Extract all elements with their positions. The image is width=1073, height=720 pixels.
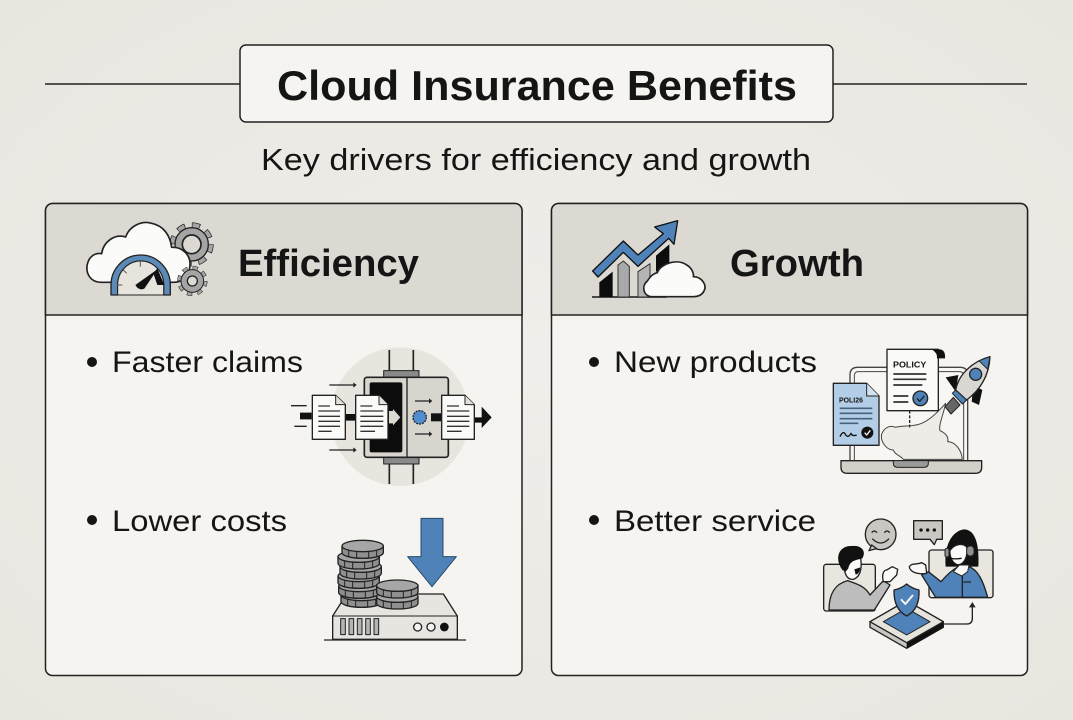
panel header: efficiency [46, 204, 522, 315]
subtitle: Key drivers for efficiency and growth [261, 142, 811, 177]
icon: coins, server and down arrow [324, 518, 466, 640]
icon: customer and agent with shield [824, 519, 993, 648]
title: Cloud Insurance Benefits [277, 62, 797, 109]
icon: cloud with gauge and gears [87, 222, 210, 295]
icon: growth chart with cloud [592, 221, 705, 297]
bullet: better service: Better service [614, 505, 816, 538]
panel: growth [552, 204, 1028, 676]
panel: efficiency [46, 204, 522, 676]
heading: efficiency: Efficiency [238, 243, 419, 285]
panel header: growth [552, 204, 1028, 315]
title [240, 45, 833, 122]
bullet: new products: New products [614, 346, 817, 379]
icon: policy documents, laptop and rocket: POLICY [893, 359, 927, 369]
bullet: faster claims: Faster claims [112, 346, 303, 379]
icon: claims processing [291, 347, 492, 486]
icon: policy documents, laptop and rocket: POLI26 [839, 398, 863, 405]
icon: policy documents, laptop and rocket [833, 349, 990, 473]
bullet: lower costs: Lower costs [112, 505, 287, 538]
heading: growth: Growth [730, 243, 864, 285]
